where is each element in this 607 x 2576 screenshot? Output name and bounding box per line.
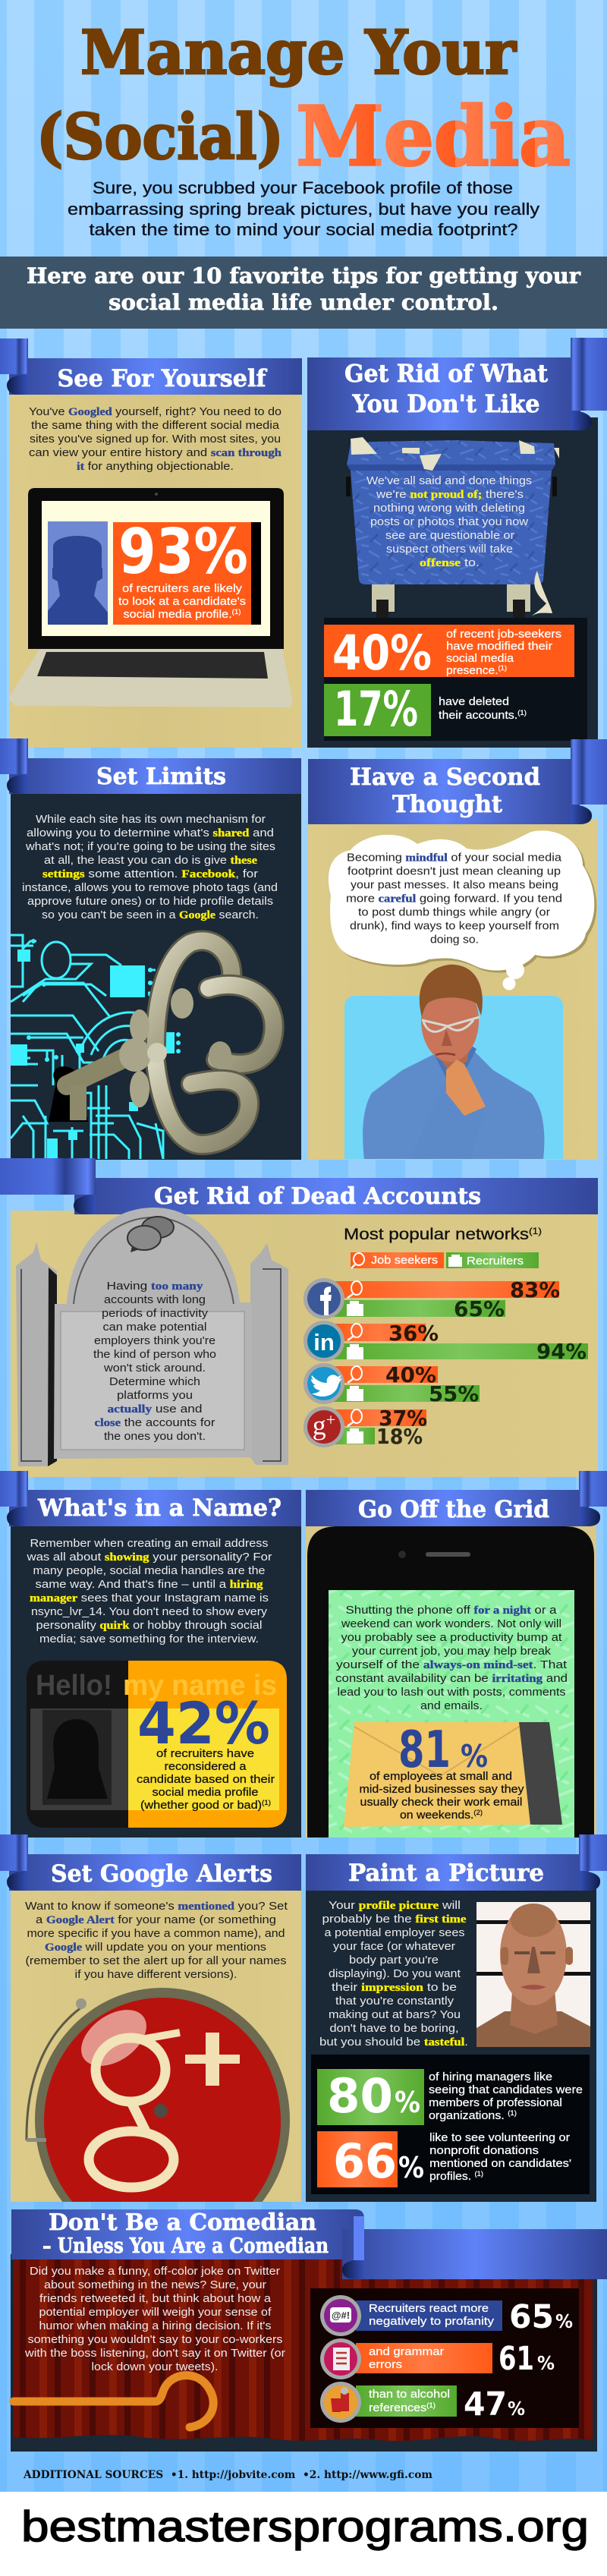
row: twitter xyxy=(304,1363,480,1406)
name tag: (whether good or bad) xyxy=(140,1799,253,1812)
panel: set limits xyxy=(0,738,301,1160)
tombstone xyxy=(16,1208,288,1466)
tombstone text: won't stick around. xyxy=(103,1362,206,1375)
dumpster text: posts or photos that you now xyxy=(370,516,529,528)
row: linkedin xyxy=(304,1321,588,1364)
profile silhouette xyxy=(48,521,108,625)
stat: 40 percent: social media xyxy=(446,652,514,665)
stats panel xyxy=(310,2288,579,2428)
tombstone text: the kind of person who xyxy=(93,1349,216,1361)
body text: Your profile picture will xyxy=(329,1900,461,1912)
body text: nsync_lvr_14. You don't need to show every xyxy=(31,1606,268,1618)
body text: friends retweeted it, but think about how a xyxy=(39,2293,272,2305)
ribbon heading: go off the grid: Go Off the Grid xyxy=(358,1496,549,1523)
row: google plus: 18% xyxy=(376,1425,423,1449)
stat: 93 percent: social media profile. xyxy=(123,608,224,621)
stat: profanity 65 percent: 65 xyxy=(509,2298,554,2336)
stat: alcohol 47 percent: 47 xyxy=(464,2385,507,2423)
ribbon heading: paint a picture xyxy=(306,1834,607,1891)
intro text: embarrassing spring break pictures, but have you really xyxy=(68,200,539,219)
footer url: bestmastersprograms.org xyxy=(21,2502,589,2551)
body text: you probably see a productivity bump at xyxy=(341,1632,561,1644)
name tag: candidate based on their xyxy=(137,1773,275,1786)
stat: 40 percent: (1) xyxy=(498,664,507,672)
stat: 66 percent: nonprofit donations xyxy=(429,2144,539,2157)
intro text: Sure, you scrubbed your Facebook profile of those xyxy=(93,178,513,197)
stat: 17 percent xyxy=(324,682,527,737)
row: twitter: 55% xyxy=(429,1382,479,1406)
bubble text: your past messes. It also means being xyxy=(351,879,558,891)
stat: 93 percent xyxy=(113,516,261,625)
body text xyxy=(335,1604,568,1712)
dumpster text: We've all said and done things xyxy=(366,475,532,487)
name tag xyxy=(27,1661,287,1828)
tombstone text: close the accounts for xyxy=(94,1417,215,1429)
stat: grammar 61 percent: % xyxy=(537,2352,555,2374)
footer url xyxy=(0,2492,607,2576)
stat: 66 percent: 66 xyxy=(333,2134,397,2189)
stat: profanity 65 percent: % xyxy=(555,2310,573,2332)
intro text: taken the time to mind your social media footprint? xyxy=(90,220,517,239)
body text: lead you to lash out with posts, comments xyxy=(337,1686,566,1699)
dumpster text: we're not proud of; there's xyxy=(376,489,524,501)
banner: 10 tips: social media life under control. xyxy=(109,290,498,315)
stat: grammar 61 percent: errors xyxy=(369,2358,402,2371)
thought bubble xyxy=(329,830,596,990)
tombstone text: platforms you xyxy=(117,1390,193,1402)
title: Manage Your xyxy=(80,17,517,88)
name tag: my name is xyxy=(123,1670,277,1702)
panel: paint a picture xyxy=(306,1834,607,2202)
stat: 66 percent: like to see volunteering or xyxy=(429,2131,570,2144)
body text: if you have different versions). xyxy=(74,1969,237,1981)
tombstone text: periods of inactivity xyxy=(102,1308,209,1320)
ribbon heading: set google alerts xyxy=(0,1834,301,1891)
stat: 80 percent: of hiring managers like xyxy=(429,2071,552,2083)
stat: 80 percent: seeing that candidates were xyxy=(429,2083,583,2096)
body text: your current job, you may help break xyxy=(352,1645,552,1658)
tombstone text xyxy=(93,1280,216,1443)
stat: grammar 61 percent: and grammar xyxy=(369,2345,444,2358)
body text: yourself of the always-on mind-set . That xyxy=(336,1659,567,1671)
mugshot portrait xyxy=(476,1902,590,2047)
stat: 66 percent: (1) xyxy=(474,2170,483,2178)
body text: Shutting the phone off for a night or a xyxy=(346,1604,558,1617)
body text: media; save something for the interview. xyxy=(39,1633,259,1645)
body text: allowing you to determine what's shared and xyxy=(27,827,274,839)
body text: manager sees that your Instagram name is xyxy=(30,1592,269,1604)
tombstone text: employers think you're xyxy=(94,1335,215,1347)
body text: something you wouldn't say to your co-workers xyxy=(27,2334,282,2346)
envelope stat: 81 xyxy=(398,1720,451,1779)
body text: that you're constantly xyxy=(335,1995,454,2008)
body text: Want to know if someone's mentioned you? Set xyxy=(25,1901,288,1913)
body text xyxy=(29,406,281,473)
stat: profanity 65 percent: negatively to profanity xyxy=(369,2315,495,2328)
body text: weekend can work wonders. Not only will xyxy=(341,1618,561,1630)
body text: constant availability can be irritating and xyxy=(335,1673,568,1685)
bar chart: networks xyxy=(304,1278,588,1449)
ribbon heading: get rid of what you don't like xyxy=(307,338,607,430)
envelope stat: mid-sized businesses say they xyxy=(360,1783,524,1796)
stats panel xyxy=(311,2055,590,2194)
key in keyhole xyxy=(49,940,274,1145)
dumpster text xyxy=(366,475,532,569)
stat: 93 percent: (1) xyxy=(232,608,241,616)
dumpster xyxy=(346,437,559,618)
row: linkedin: in xyxy=(313,1329,335,1356)
ribbon heading: go off the grid xyxy=(306,1471,607,1526)
body text: potential employer will weigh your sense of xyxy=(39,2307,272,2319)
name tag: of recruiters have xyxy=(156,1747,254,1760)
row: facebook xyxy=(304,1278,560,1321)
body text: a potential employer sees xyxy=(325,1927,464,1939)
envelope stat: (2) xyxy=(473,1809,483,1816)
panel: what's in a name xyxy=(0,1471,301,1838)
stat: alcohol 47 percent xyxy=(320,2382,525,2423)
body text: a Google Alert for your name (or something xyxy=(36,1914,276,1926)
ribbon heading: get rid of what you don't like: You Don't Like xyxy=(352,389,540,418)
panel: have a second thought xyxy=(308,739,607,1160)
body text: settings some attention. Facebook , for xyxy=(42,868,258,880)
thoughtful man xyxy=(344,965,563,1160)
stat: 40 percent: have modified their xyxy=(446,640,552,653)
envelope stat: usually check their work email xyxy=(360,1796,522,1809)
body text: your face (or whatever xyxy=(333,1941,455,1953)
body text xyxy=(24,2266,285,2373)
stat: alcohol 47 percent: references xyxy=(369,2401,423,2414)
stat: 93 percent: of recruiters are likely xyxy=(122,582,243,595)
envelope stat: % xyxy=(461,1738,488,1775)
stat: 66 percent: profiles. xyxy=(429,2170,470,2183)
stat: 80 percent xyxy=(317,2068,583,2125)
ribbon heading: have a second thought: Have a Second xyxy=(350,764,540,791)
name tag: 42% xyxy=(137,1690,270,1757)
panel: set google alerts xyxy=(0,1834,301,2202)
stat: grammar 61 percent xyxy=(320,2338,555,2379)
stat: 80 percent: members of professional xyxy=(429,2096,562,2109)
panel: get rid of what you don't like xyxy=(307,338,607,748)
body text: personality quirk or hobby through social xyxy=(36,1620,263,1632)
panel: don't be a comedian xyxy=(11,2209,607,2452)
intro text xyxy=(68,178,539,239)
stat: 17 percent: (1) xyxy=(517,709,527,716)
ribbon heading: see for yourself xyxy=(0,339,302,395)
stat: profanity 65 percent: @#! xyxy=(332,2310,350,2321)
name tag: social media profile xyxy=(152,1786,258,1799)
stat: 80 percent: 80 xyxy=(327,2068,393,2124)
body text: approve future ones) or to hide profile details xyxy=(27,896,273,908)
chart title: (1) xyxy=(529,1226,542,1236)
ribbon heading: get rid of dead accounts: Get Rid of Dead Accounts xyxy=(154,1183,481,1210)
body text: and emails. xyxy=(420,1700,483,1712)
body text: You've Googled yourself, right? You need to do xyxy=(29,406,281,418)
envelope stat xyxy=(344,1720,562,1827)
row: facebook: 65% xyxy=(454,1297,505,1321)
bubble text: more careful going forward. If you tend xyxy=(346,893,562,905)
row: google plus: 37% xyxy=(379,1406,427,1431)
body text: don't have to be boring, xyxy=(329,2023,458,2035)
tombstone text: actually use and xyxy=(108,1403,202,1416)
title xyxy=(36,17,571,184)
body text: While each site has its own mechanism for xyxy=(36,814,266,826)
stat: 40 percent: of recent job-seekers xyxy=(446,628,561,641)
body text: with the boss listening, don't say it on Twitter (or xyxy=(24,2348,285,2360)
vaudeville cane xyxy=(14,2376,213,2427)
body text: humor when making a hiring decision. If it's xyxy=(39,2320,272,2332)
stat: profanity 65 percent: Recruiters react more xyxy=(369,2302,489,2315)
bubble text xyxy=(346,852,562,946)
ribbon heading: don't be a comedian: Don't Be a Comedian xyxy=(49,2209,316,2236)
body text: (remember to set the alert up for all your names xyxy=(26,1955,287,1967)
row: google plus: g xyxy=(313,1410,326,1441)
ribbon heading: what's in a name: What's in a Name? xyxy=(37,1494,281,1522)
body text: so you can't be seen in a Google search. xyxy=(42,909,259,921)
body text: instance, allows you to remove photo tags (and xyxy=(22,882,278,894)
body text: Did you make a funny, off-color joke on Twitter xyxy=(30,2266,280,2278)
body text: displaying). Do you want xyxy=(329,1968,461,1980)
body text: Remember when creating an email address xyxy=(30,1538,269,1550)
body text: many people, social media handles are the xyxy=(33,1565,266,1577)
stat: 93 percent: to look at a candidate's xyxy=(118,595,246,608)
stat: 93 percent: 93% xyxy=(118,516,248,588)
row: twitter: 40% xyxy=(385,1363,436,1387)
stat: 80 percent: % xyxy=(395,2086,420,2119)
body text: same way. And that's fine – until a hiring xyxy=(35,1579,263,1591)
bubble text: footprint doesn't just mean cleaning up xyxy=(348,865,561,877)
phone xyxy=(307,1526,594,1838)
body text xyxy=(319,1900,468,2049)
body text: Google will update you on your mentions xyxy=(45,1941,266,1954)
body text xyxy=(22,814,278,921)
stat: 66 percent: mentioned on candidates' xyxy=(429,2157,571,2170)
body text: it for anything objectionable. xyxy=(77,461,234,473)
sources: ADDITIONAL SOURCES •1. http://jobvite.com •2. http://www.gfi.com xyxy=(23,2469,432,2481)
row: google plus: + xyxy=(326,1410,335,1429)
dumpster text: suspect others will take xyxy=(386,543,513,556)
body text xyxy=(25,1901,288,1981)
body text: what's not; if you're going to be using the sites xyxy=(25,841,275,853)
ribbon heading: don't be a comedian xyxy=(11,2209,607,2279)
stat: alcohol 47 percent: % xyxy=(508,2398,525,2420)
body text: probably be the first time xyxy=(322,1913,467,1926)
tombstone text: Determine which xyxy=(109,1376,200,1388)
title: (Social) xyxy=(36,101,284,174)
chart legend xyxy=(351,1252,539,1268)
ribbon heading: what's in a name xyxy=(0,1471,301,1526)
body text: was all about showing your personality? For xyxy=(26,1551,272,1564)
chart legend: Recruiters xyxy=(467,1255,524,1268)
body text: lock down your tweets). xyxy=(91,2361,219,2373)
row: google plus xyxy=(304,1406,427,1449)
stat: 17 percent: have deleted xyxy=(439,695,509,708)
body text: body part you're xyxy=(349,1954,439,1967)
body text: the same thing with the different social media xyxy=(31,420,280,432)
panel: get rid of dead accounts xyxy=(0,1158,598,1477)
ribbon heading: get rid of dead accounts xyxy=(0,1158,598,1214)
circuit board graphic xyxy=(11,935,181,1159)
ribbon heading: get rid of what you don't like: Get Rid of What xyxy=(344,359,548,388)
name tag: reconsidered a xyxy=(164,1760,247,1773)
tombstone text: the ones you don't. xyxy=(104,1431,206,1443)
envelope stat: on weekends. xyxy=(400,1809,470,1822)
body text: their impression to be xyxy=(332,1982,457,1994)
stat: grammar 61 percent: 61 xyxy=(498,2340,534,2378)
banner: 10 tips xyxy=(0,257,607,329)
panel: see for yourself xyxy=(0,339,302,748)
stat: 40 percent xyxy=(324,625,574,681)
bubble text: doing so. xyxy=(430,934,479,946)
laptop xyxy=(8,488,293,707)
ribbon heading: set limits: Set Limits xyxy=(96,764,226,790)
row: facebook: 83% xyxy=(510,1278,560,1302)
dumpster text: see are questionable or xyxy=(385,530,514,542)
tombstone text: can make potential xyxy=(103,1321,206,1334)
ribbon heading: have a second thought: Thought xyxy=(392,791,503,818)
body text: but you should be tasteful . xyxy=(319,2036,468,2049)
ribbon heading: don't be a comedian: – Unless You Are a Comedian xyxy=(42,2234,329,2258)
title: Media xyxy=(296,90,571,184)
dumpster text: nothing wrong with deleting xyxy=(373,502,525,515)
body text: more specific if you have a common name), and xyxy=(27,1928,285,1940)
stat: alcohol 47 percent: (1) xyxy=(426,2401,436,2409)
stat: 17 percent: 17% xyxy=(334,682,418,737)
body text: sites you've signed up for. With most sites, you xyxy=(30,433,281,446)
tombstone text: accounts with long xyxy=(104,1294,206,1306)
row: linkedin: 36% xyxy=(388,1321,439,1346)
chart title: Most popular networks xyxy=(344,1226,504,1243)
stat: 17 percent: their accounts. xyxy=(439,709,513,722)
ribbon heading: have a second thought xyxy=(308,739,607,824)
body text: can view your entire history and scan through xyxy=(29,447,281,459)
row: linkedin: 94% xyxy=(536,1340,587,1364)
ribbon heading: paint a picture: Paint a Picture xyxy=(348,1860,544,1887)
stats panel xyxy=(324,618,587,741)
stat: 80 percent: (1) xyxy=(508,2109,517,2117)
banner: 10 tips: Here are our 10 favorite tips for getting your xyxy=(27,263,581,288)
name tag: Hello! xyxy=(36,1670,112,1702)
chart legend: Job seekers xyxy=(371,1254,438,1267)
envelope stat: of employees at small and xyxy=(370,1770,512,1783)
ribbon heading: set limits xyxy=(0,738,301,794)
stat: 66 percent: % xyxy=(398,2151,424,2184)
bubble text: drunk), find ways to keep yourself from xyxy=(350,920,559,932)
stat: 80 percent: organizations. xyxy=(429,2109,499,2122)
stat: 40 percent: presence. xyxy=(446,664,496,677)
panel: go off the grid xyxy=(306,1471,607,1838)
dumpster text: offense to. xyxy=(420,557,480,569)
body text xyxy=(26,1538,272,1645)
google plus alarm bell xyxy=(26,1988,290,2202)
stage curtain xyxy=(14,2254,593,2441)
bubble text: to post dumb things while angry (or xyxy=(358,906,550,918)
stat: 40 percent: 40% xyxy=(332,625,432,681)
stat: profanity 65 percent xyxy=(320,2295,573,2336)
ribbon heading: see for yourself: See For Yourself xyxy=(58,365,267,392)
bubble text: Becoming mindful of your social media xyxy=(347,852,562,864)
stat: alcohol 47 percent: than to alcohol xyxy=(369,2388,450,2401)
body text: about something in the news? Sure, your xyxy=(44,2279,266,2291)
tombstone text: Having too many xyxy=(106,1280,203,1293)
body text: making out at bars? You xyxy=(329,2009,461,2021)
stat: 66 percent xyxy=(317,2131,571,2189)
body text: at all, the least you can do is give these xyxy=(44,855,258,867)
name tag: (1) xyxy=(262,1799,271,1806)
ribbon heading: set google alerts: Set Google Alerts xyxy=(51,1860,272,1888)
